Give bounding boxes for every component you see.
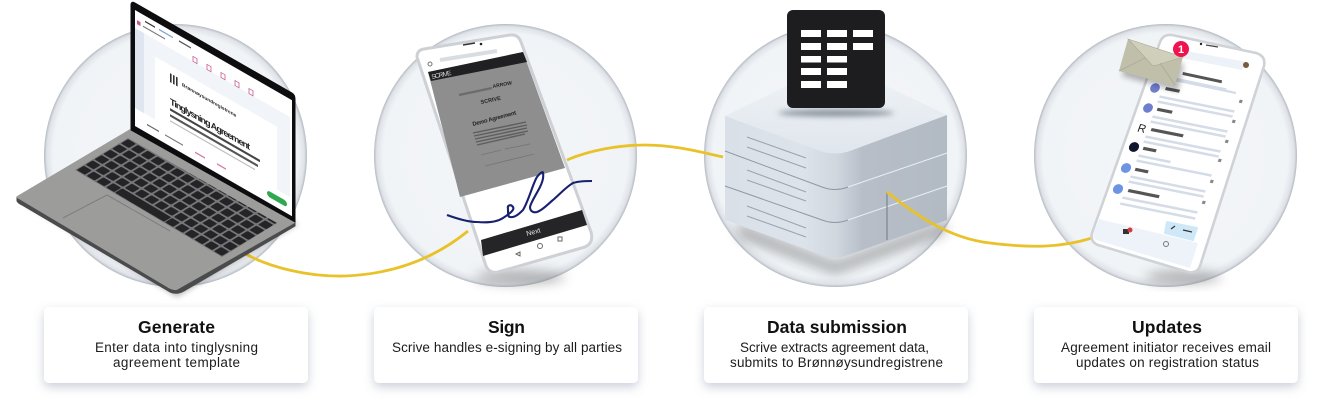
server body: [725, 115, 947, 258]
message row 1: [1175, 71, 1228, 91]
connector: laptop to sign: [244, 231, 468, 276]
browser bar: [440, 51, 497, 60]
nav icons: [516, 237, 562, 256]
message row 2: [1146, 82, 1243, 119]
logo mark: [170, 73, 178, 86]
card heading: sign: Sign: [488, 317, 525, 337]
space bar: [115, 188, 171, 222]
screen content: Tinglysning Agreement: [170, 97, 251, 153]
message row 7: [1108, 183, 1206, 221]
seams: [725, 151, 848, 222]
card heading: updates: Updates: [1132, 317, 1202, 337]
background disc: generate: [44, 24, 307, 287]
card text: data submission: submits to Brønnøysundregistrene: [730, 355, 943, 370]
laptop screen: [131, 2, 295, 222]
speaker and camera: [463, 43, 475, 45]
mail tab icon: [1123, 229, 1129, 234]
card: data submission: [704, 307, 968, 383]
dark header: [428, 52, 527, 81]
notification badge: [1173, 41, 1189, 57]
port seam: [886, 192, 888, 240]
trackpad: [63, 195, 170, 231]
compose button: [1165, 222, 1197, 240]
icon shadow: [778, 110, 894, 116]
card: updates: [1034, 307, 1298, 383]
connector: data submission to updates: [887, 192, 1092, 246]
grey document screen: [428, 52, 565, 197]
next button: [481, 210, 587, 256]
speaker and camera: [1200, 43, 1202, 45]
card text: updates: [1061, 340, 1271, 370]
next label: Next: [526, 227, 541, 238]
document heading: Demo Agreement: [472, 110, 517, 128]
phone body: [1092, 35, 1264, 272]
background disc: sign: [374, 24, 637, 287]
card text: generate: agreement template: [113, 355, 240, 370]
card text: updates: Agreement initiator receives email: [1061, 340, 1271, 355]
server illustration: [725, 10, 947, 274]
vents: [747, 137, 806, 237]
card text: data submission: Scrive extracts agreement data,: [740, 340, 929, 355]
logo text: ARROW: [492, 80, 513, 90]
card text: generate: [95, 340, 258, 370]
card text: sign: Scrive handles e-signing by all parties: [392, 340, 622, 355]
updates phone illustration: [1092, 35, 1264, 282]
laptop base: [17, 130, 295, 293]
message row 6: [1116, 162, 1214, 199]
keyboard: [75, 138, 277, 257]
document body: [473, 122, 528, 145]
screen content: [135, 10, 292, 216]
server top: [725, 62, 947, 154]
laptop illustration: [17, 2, 298, 297]
card heading: data submission: Data submission: [767, 317, 907, 337]
message row 3: [1139, 102, 1236, 139]
card heading: generate: Generate: [138, 317, 215, 337]
message row 4: [1133, 122, 1229, 159]
header brand: SCRIVE: [431, 70, 453, 81]
message row 4: R: [1136, 123, 1148, 136]
background disc: data submission: [704, 24, 967, 287]
envelope: [1119, 39, 1183, 86]
bottom navigation: [1093, 219, 1198, 268]
card text: updates: updates on registration status: [1076, 355, 1259, 370]
card text: data submission: [730, 340, 943, 370]
document logo: SCRIVE: [480, 96, 502, 106]
sign phone illustration: [417, 35, 592, 283]
account avatar: [1243, 62, 1249, 68]
screen content: Brønnøysundregistrene: [182, 82, 236, 119]
card: generate: [44, 307, 308, 383]
card text: generate: Enter data into tinglysning: [95, 340, 258, 355]
connector: sign to data submission: [567, 145, 723, 160]
search bar: [1176, 50, 1247, 70]
table icon: [787, 10, 885, 108]
signature: [447, 172, 592, 222]
green button: [267, 190, 287, 207]
card: sign: [374, 307, 638, 383]
meet tab icon: [1164, 242, 1168, 246]
phone body: [417, 35, 592, 272]
message row 5: [1124, 141, 1222, 178]
notification badge: 1: [1178, 44, 1184, 56]
envelope shadow: [1122, 48, 1184, 92]
background disc: updates: [1034, 24, 1297, 287]
